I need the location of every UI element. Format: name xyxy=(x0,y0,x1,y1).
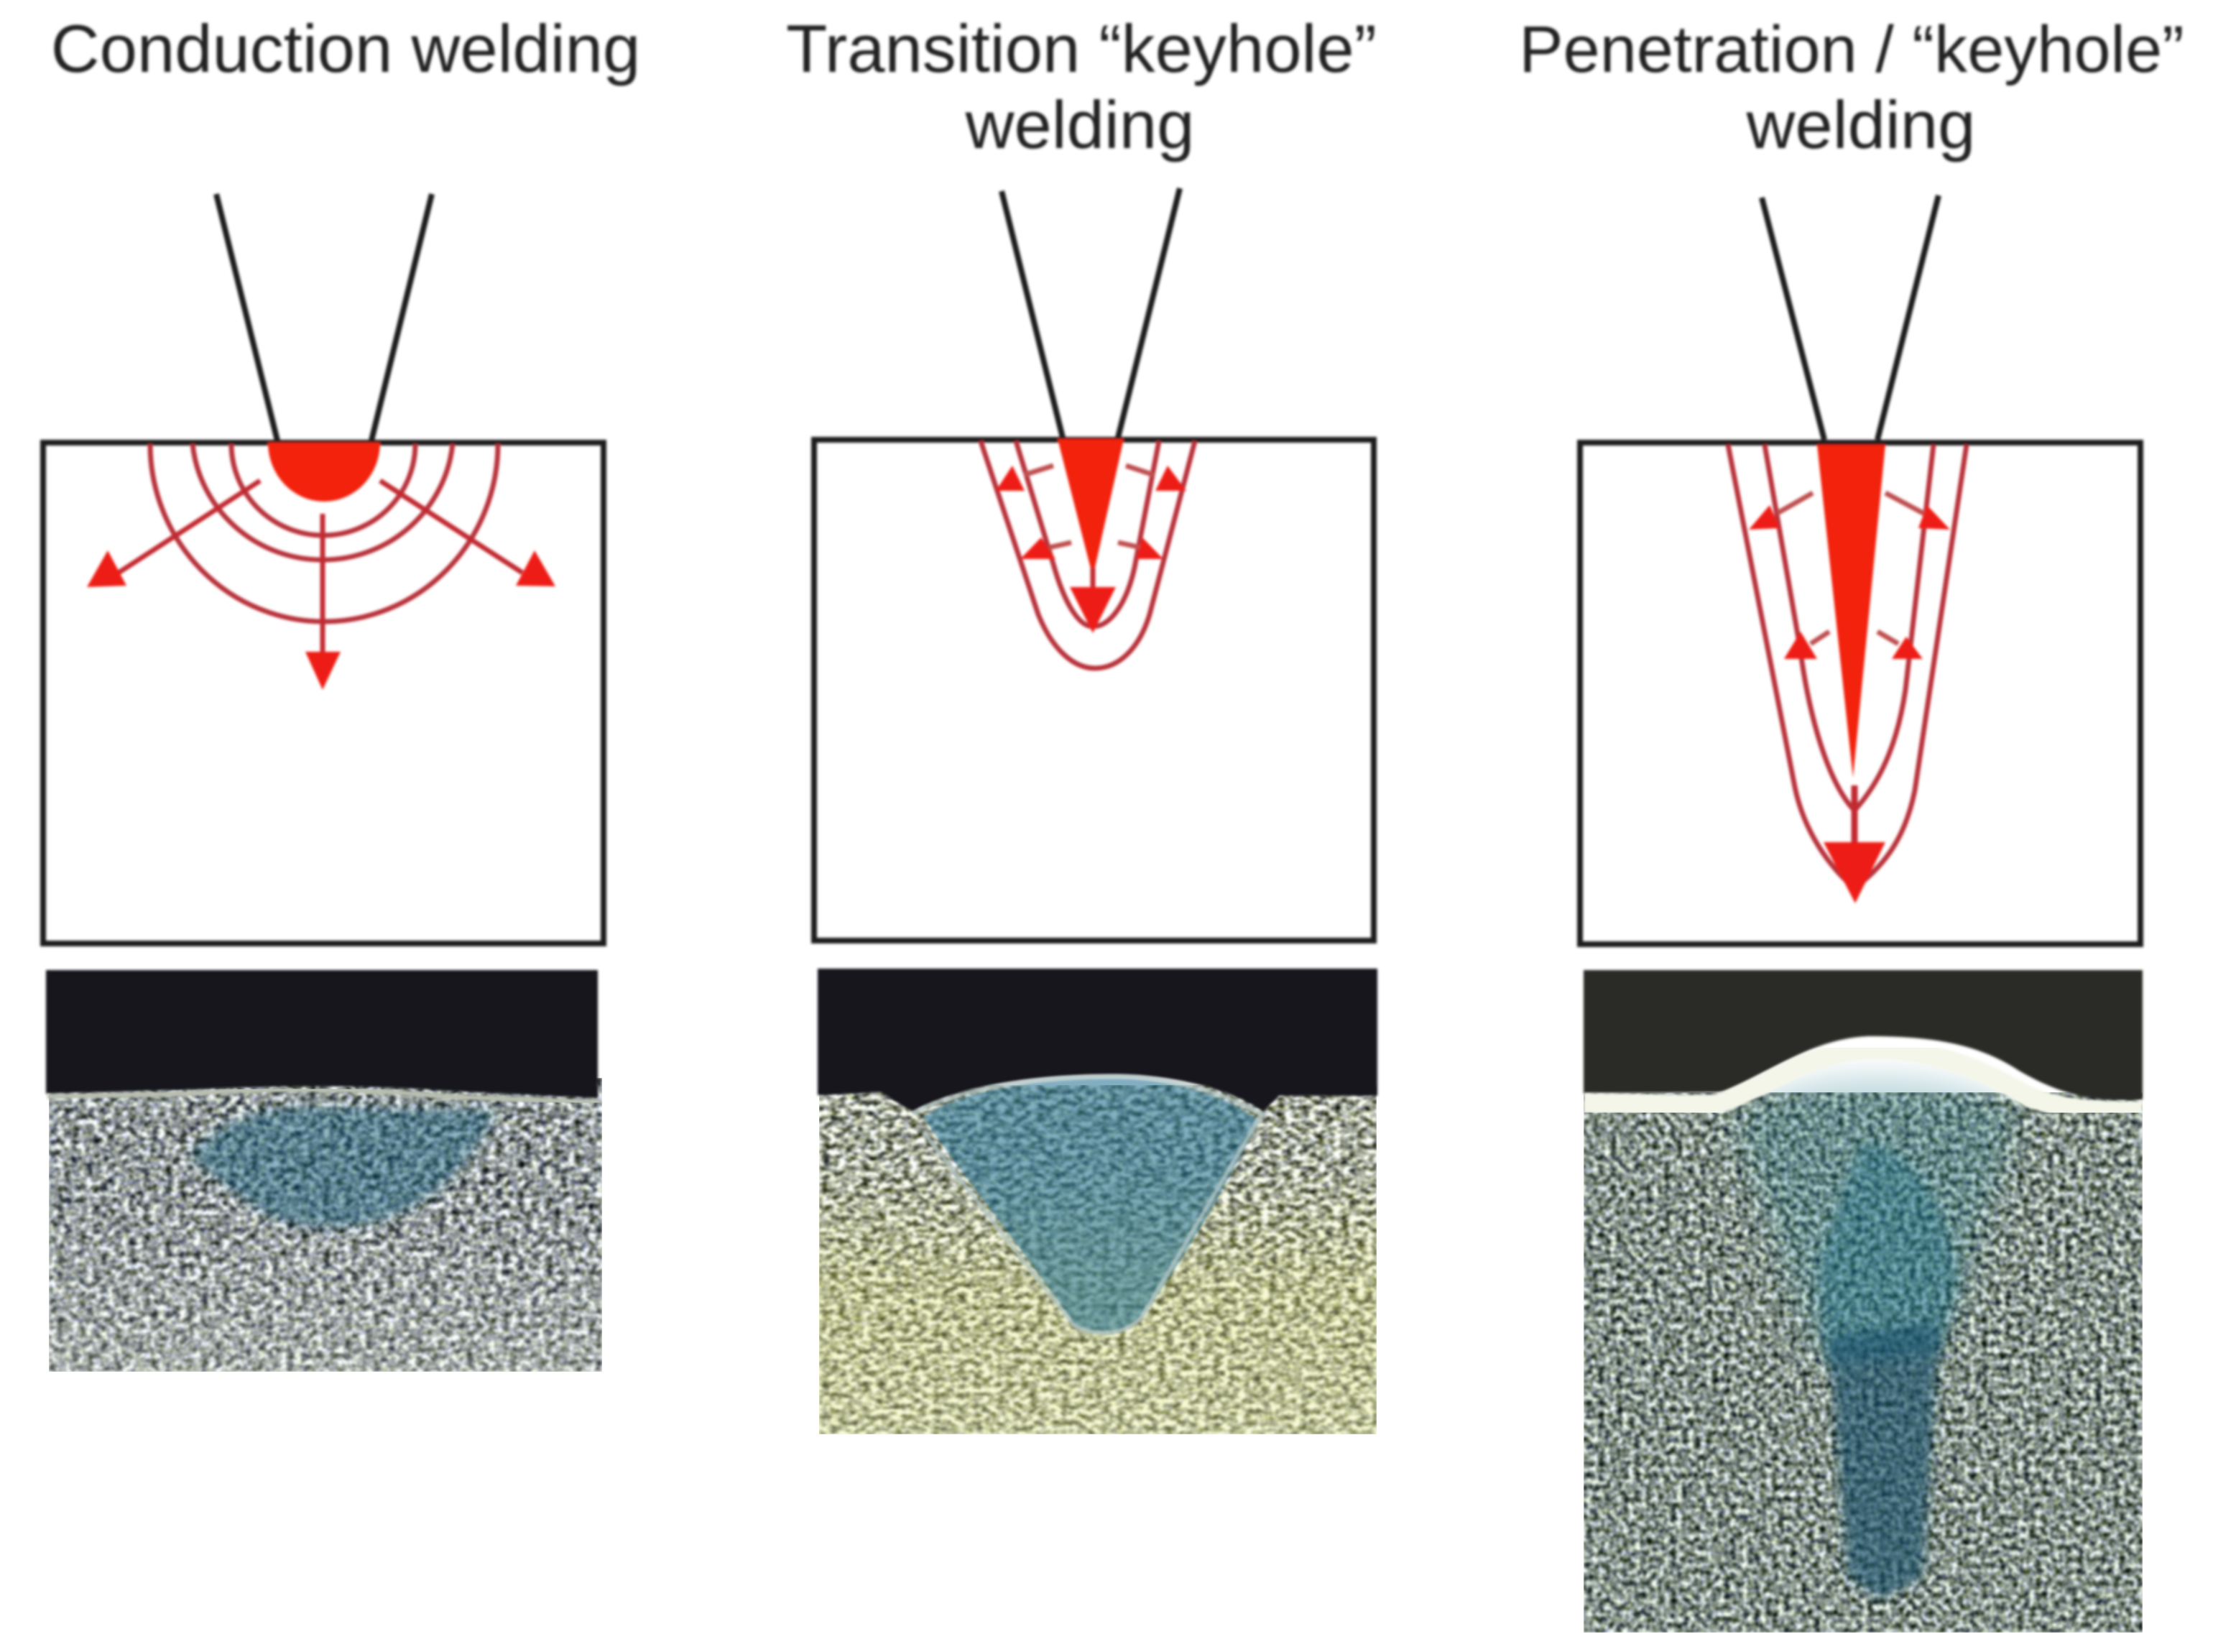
heat zone contours xyxy=(1728,445,1967,888)
photo: transition weld cross-section xyxy=(818,969,1377,1434)
title: penetration keyhole welding: Penetration / “keyhole” xyxy=(1519,13,2184,86)
dark background above surface xyxy=(818,969,1377,1112)
laser beam lines xyxy=(216,194,432,440)
panel: transition keyhole diagram xyxy=(814,188,1374,941)
dark background above surface xyxy=(46,970,598,1098)
metal texture xyxy=(1584,1092,2143,1633)
lighter lower tone xyxy=(49,1193,602,1372)
heat flow arrows xyxy=(996,466,1186,633)
yellow tone lower band xyxy=(819,1164,1377,1434)
keyhole xyxy=(1817,445,1885,777)
material box xyxy=(43,443,604,943)
melt pool xyxy=(268,443,380,502)
surface highlight xyxy=(47,1089,601,1102)
keyhole xyxy=(1058,439,1124,577)
weld zone mid xyxy=(1818,1143,1960,1365)
panel: conduction welding diagram xyxy=(43,194,604,943)
heat flow arrows xyxy=(87,481,555,690)
dark background above surface xyxy=(1584,970,2143,1100)
photo: conduction weld cross-section xyxy=(46,970,602,1372)
material box xyxy=(1580,443,2140,944)
heat zone contours xyxy=(981,441,1195,668)
title: transition keyhole welding xyxy=(786,11,1377,162)
title: transition keyhole welding: Transition “keyhole” xyxy=(786,11,1377,86)
material box xyxy=(814,440,1374,941)
heat zone contours xyxy=(150,444,498,622)
bright surface band xyxy=(1584,1049,2143,1111)
laser beam lines xyxy=(1762,195,1939,440)
laser beam lines xyxy=(1002,188,1180,438)
metal texture xyxy=(49,1078,602,1372)
title: transition keyhole welding: welding xyxy=(965,87,1194,162)
weld zone upper xyxy=(1732,1076,2019,1351)
photo: penetration weld cross-section xyxy=(1584,970,2143,1633)
panel: penetration keyhole diagram xyxy=(1580,195,2140,944)
title: conduction welding: Conduction welding xyxy=(51,11,640,86)
heat flow arrows xyxy=(1749,493,1950,903)
metal texture xyxy=(819,1085,1377,1434)
weld outline xyxy=(913,1076,1262,1333)
weld zone xyxy=(923,1078,1259,1333)
weld zone stem xyxy=(1829,1322,1940,1599)
title: penetration keyhole welding xyxy=(1519,13,2184,162)
title: penetration keyhole welding: welding xyxy=(1746,87,1975,162)
weld zone xyxy=(190,1107,497,1227)
